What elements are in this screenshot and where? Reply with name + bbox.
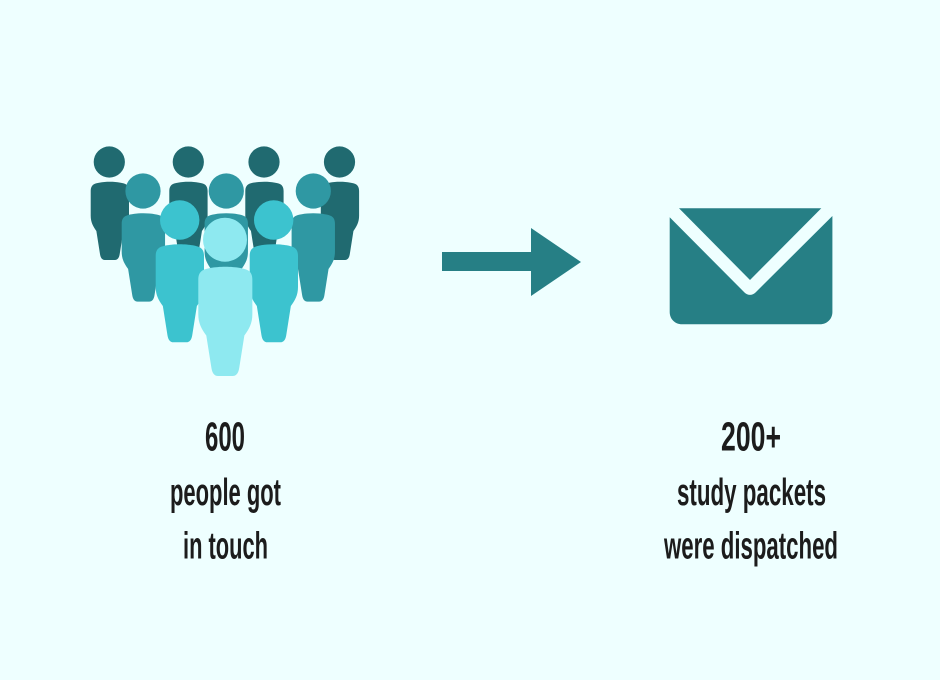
text: study packets were dispatched: study packets: [677, 472, 826, 514]
front person: [198, 218, 252, 376]
text: people got in touch: 600: [205, 414, 245, 460]
text: study packets were dispatched: [663, 414, 838, 568]
text: people got in touch: people got: [170, 472, 281, 514]
arrow: [442, 228, 581, 296]
text: study packets were dispatched: 200+: [721, 414, 781, 460]
back row of people: [91, 146, 359, 260]
text: people got in touch: in touch: [183, 526, 268, 568]
text: people got in touch: [170, 414, 281, 568]
third row of people: [156, 200, 298, 342]
second row of people: [122, 173, 335, 302]
icon: envelope: [670, 208, 832, 324]
icon: group of people: [91, 146, 359, 376]
